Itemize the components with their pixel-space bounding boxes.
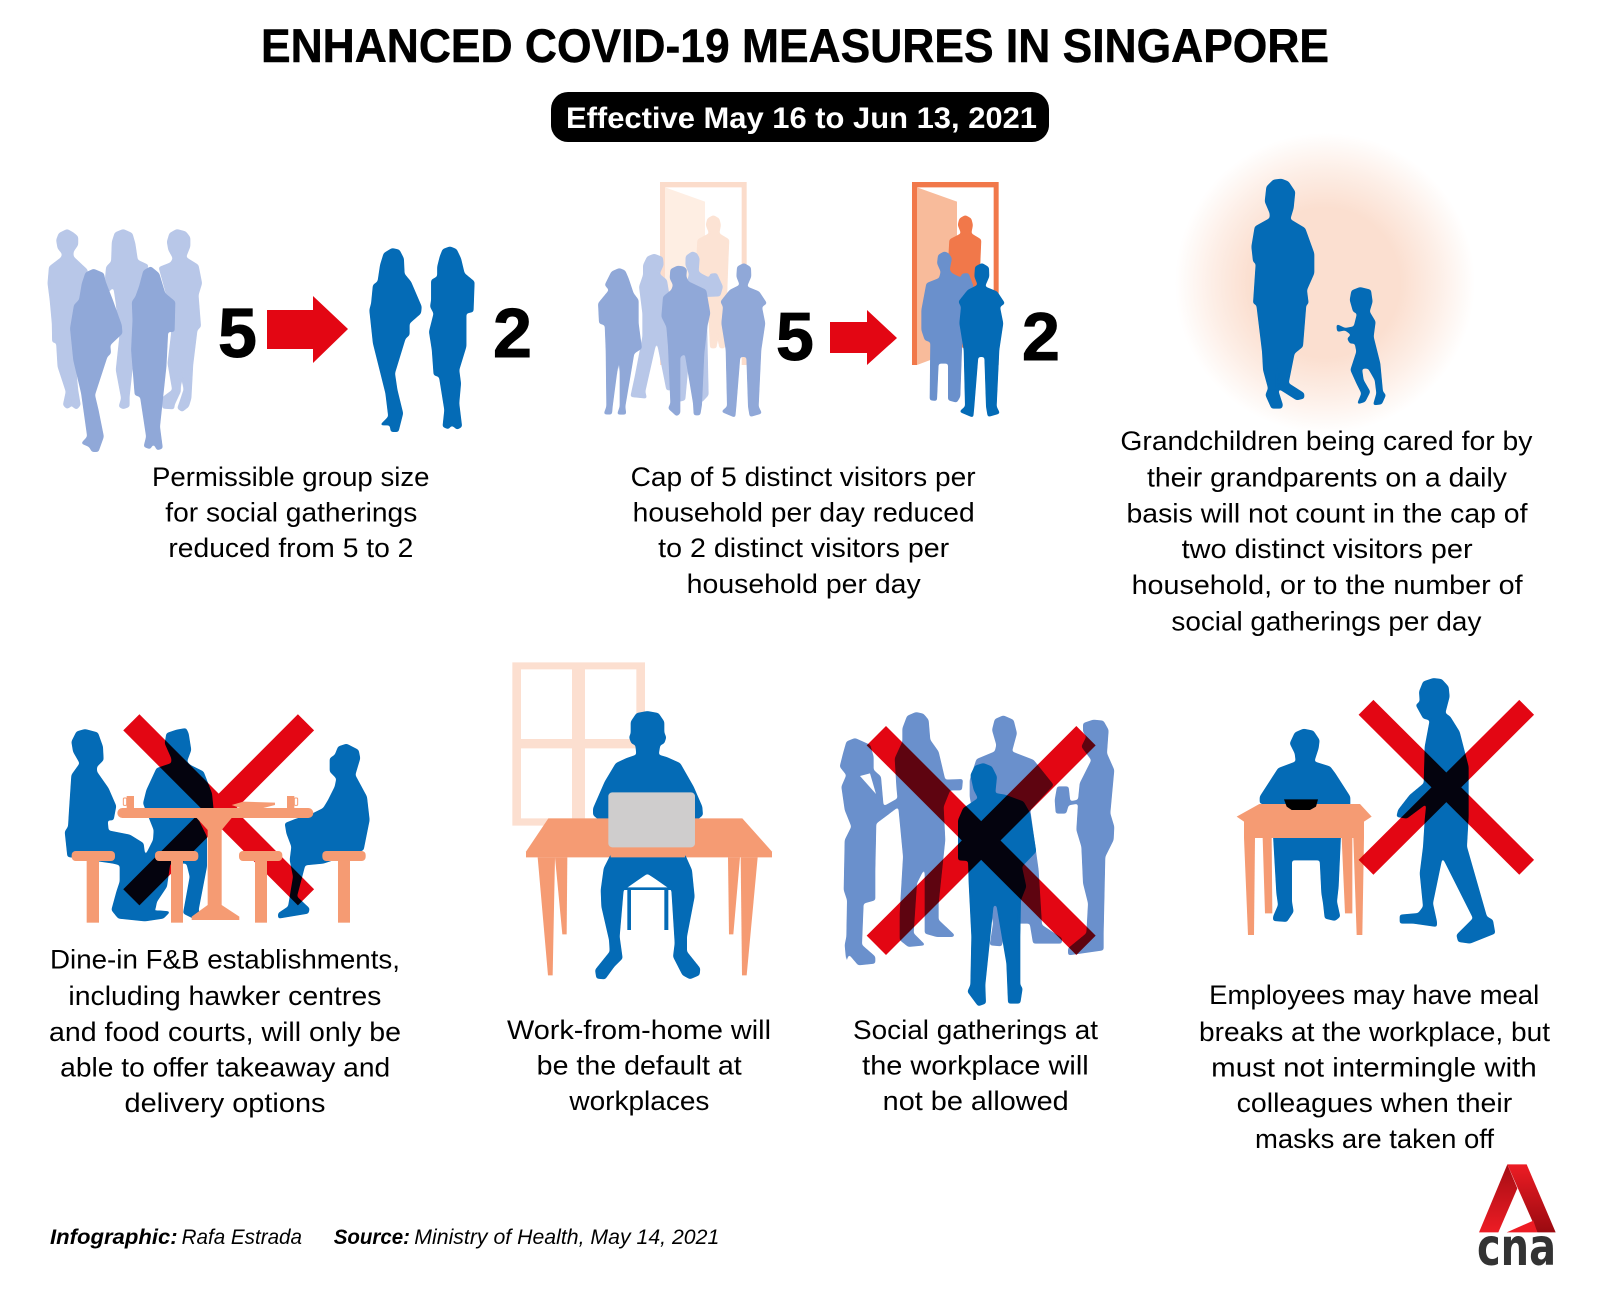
date pill: [551, 92, 1049, 142]
caption: group size: for social gatherings: [165, 498, 417, 528]
caption: meal breaks: [1199, 980, 1551, 1154]
footer credits: Infographic:: [50, 1226, 178, 1249]
panel: work from home: [507, 662, 772, 1116]
arrow: [830, 310, 897, 365]
caption: grandchildren: household, or to the number of: [1132, 570, 1523, 600]
caption: workplace gatherings: not be allowed: [883, 1086, 1069, 1116]
title: ENHANCED COVID-19 MEASURES IN SINGAPORE: [261, 19, 1329, 72]
caption: visitors: household per day: [687, 569, 921, 599]
caption: dine-in: [49, 944, 401, 1118]
caption: workplace gatherings: [853, 1015, 1099, 1116]
caption: meal breaks: must not intermingle with: [1211, 1052, 1537, 1082]
caption: workplace gatherings: the workplace will: [862, 1050, 1089, 1080]
icon: gathering crossed out: [840, 712, 1114, 1006]
caption: group size: [152, 462, 430, 563]
caption: work from home: be the default at: [537, 1050, 742, 1080]
caption: grandchildren: their grandparents on a daily: [1147, 462, 1508, 492]
caption: work from home: workplaces: [568, 1086, 709, 1116]
caption: grandchildren: two distinct visitors per: [1182, 534, 1473, 564]
icon: five faded people: [48, 229, 202, 452]
caption: work from home: Work-from-home will: [507, 1015, 771, 1045]
icon: diners at table crossed out: [65, 722, 369, 923]
panel: household visitors: [598, 182, 1060, 599]
caption: meal breaks: masks are taken off: [1255, 1124, 1494, 1154]
caption: visitors: Cap of 5 distinct visitors per: [631, 462, 976, 492]
caption: visitors: household per day reduced: [633, 498, 975, 528]
footer credits: Source:: [334, 1226, 410, 1249]
icon: faded door and five visitors: [598, 182, 767, 417]
caption: visitors: to 2 distinct visitors per: [658, 533, 949, 563]
caption: dine-in: including hawker centres: [68, 981, 381, 1011]
icon: two women: [370, 247, 474, 432]
icon: person at desk with laptop: [512, 662, 772, 979]
panel: workplace gatherings: [840, 712, 1114, 1116]
footer credits: Ministry of Health, May 14, 2021: [414, 1226, 719, 1249]
caption: dine-in: delivery options: [124, 1088, 326, 1118]
logo: cna: cna: [1477, 1218, 1556, 1278]
caption: dine-in: and food courts, will only be: [49, 1017, 401, 1047]
caption: workplace gatherings: Social gatherings at: [853, 1015, 1099, 1045]
footer credits: [50, 1226, 719, 1249]
caption: grandchildren: basis will not count in the cap of: [1126, 498, 1528, 528]
caption: group size: reduced from 5 to 2: [168, 533, 413, 563]
arrow: [267, 296, 348, 363]
number 5: 5: [218, 294, 257, 372]
icon: door and two visitors: [912, 182, 1005, 417]
panel: dine-in: [49, 722, 401, 1118]
caption: meal breaks: breaks at the workplace, but: [1199, 1017, 1551, 1047]
caption: work from home: [507, 1015, 771, 1116]
caption: visitors: [631, 462, 976, 599]
caption: group size: Permissible group size: [152, 462, 430, 492]
caption: dine-in: Dine-in F&B establishments,: [50, 944, 400, 974]
logo: cna: [1477, 1164, 1556, 1278]
number 2: 2: [1022, 299, 1060, 375]
icon: glow behind figures: [1175, 133, 1475, 433]
number 2: 2: [493, 294, 532, 372]
panel: meal breaks: [1199, 678, 1551, 1154]
date pill: Effective May 16 to Jun 13, 2021: [566, 102, 1037, 135]
caption: dine-in: able to offer takeaway and: [60, 1052, 390, 1082]
caption: grandchildren: Grandchildren being cared for by: [1120, 426, 1533, 456]
caption: meal breaks: Employees may have meal: [1209, 980, 1539, 1010]
footer credits: Rafa Estrada: [182, 1226, 302, 1249]
icon: seated employee and crossed-out walker: [1237, 678, 1527, 943]
caption: meal breaks: colleagues when their: [1237, 1088, 1512, 1118]
number 5: 5: [776, 299, 814, 375]
icon: grandparent and child: [1252, 179, 1386, 408]
panel: grandchildren: [1120, 133, 1533, 636]
caption: grandchildren: [1120, 426, 1533, 636]
panel: group size: [48, 229, 532, 563]
caption: grandchildren: social gatherings per day: [1171, 606, 1482, 636]
